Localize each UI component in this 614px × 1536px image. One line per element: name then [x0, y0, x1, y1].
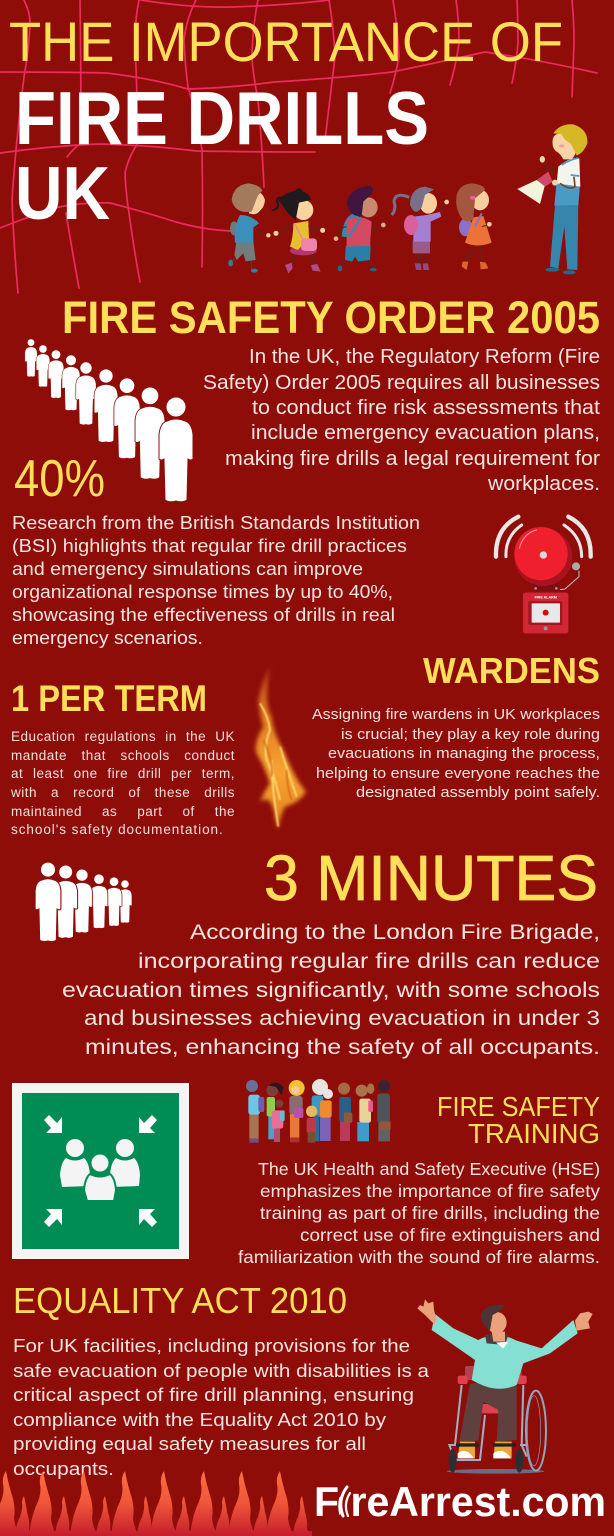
text: British Standards Institution research: (BSI) highlights that regular fire drill practices [12, 536, 407, 556]
decorative flames along bottom [0, 1471, 312, 1536]
text: British Standards Institution research: showcasing the effectiveness of drills in real [12, 605, 395, 625]
text: equality act paragraph: safe evacuation of people with disabilities is a [13, 1360, 430, 1381]
text: British Standards Institution research: organizational response times by up to 40%, [12, 582, 393, 602]
text: equality act paragraph: providing equal safety measures for all [13, 1433, 366, 1454]
text: Health and Safety Executive: correct use of fire extinguishers and [300, 1225, 600, 1245]
text: school fire drill paragraph: Education regulations in the UK [11, 729, 235, 744]
title: FIRE DRILLS [15, 76, 429, 160]
text: school fire drill paragraph: maintained as part of the [11, 804, 235, 819]
text: Health and Safety Executive: familiarization with the sound of fire alarms. [238, 1247, 600, 1267]
text: regulatory reform order: workplaces. [487, 473, 600, 495]
text: equality act paragraph: critical aspect of fire drill planning, ensuring [13, 1384, 414, 1405]
text: equality act paragraph: occupants. [13, 1458, 114, 1479]
illustration: children walking in line [228, 183, 386, 273]
text: London Fire Brigade [62, 921, 600, 1059]
title: UK [15, 151, 110, 235]
text: wardens paragraph: evacuations in managing the process, [328, 746, 600, 762]
text: Health and Safety Executive: training as part of fire drills, including the [260, 1203, 600, 1223]
kid five [456, 183, 492, 270]
teacher [517, 124, 587, 274]
logo: FireArrest.com: FireArrest.com [314, 1478, 606, 1525]
title [9, 10, 563, 235]
heading: equality act 2010: EQUALITY ACT 2010 [13, 1280, 347, 1321]
text: London Fire Brigade: minutes, enhancing the safety of all occupants. [85, 1036, 600, 1059]
text: Health and Safety Executive: The UK Health and Safety Executive (HSE) [258, 1159, 600, 1179]
stat: 40%: 40% [14, 450, 105, 508]
text: regulatory reform order: to conduct fire risk assessments that [252, 397, 600, 419]
heading: fire safety training: FIRE SAFETY [437, 1091, 600, 1122]
text: London Fire Brigade: and businesses achieving evacuation in under 3 [84, 1007, 600, 1030]
heading: fire safety training [437, 1091, 600, 1149]
text: regulatory reform order: include emergency evacuation plans, [251, 422, 600, 444]
text: equality act paragraph: compliance with the Equality Act 2010 by [13, 1409, 387, 1430]
text: school fire drill paragraph: with a record of these drills [11, 785, 235, 800]
kid two [272, 188, 325, 273]
kid four [392, 187, 449, 270]
heading: fire safety training: TRAINING [468, 1118, 600, 1149]
icon: queue of nine people [25, 339, 193, 502]
text: regulatory reform order: In the UK, the Regulatory Reform (Fire [249, 346, 600, 368]
heading: 3 minutes: 3 MINUTES [264, 842, 598, 914]
heading: wardens: WARDENS [423, 650, 600, 691]
text: British Standards Institution research: emergency scenarios. [12, 628, 203, 648]
text: school fire drill paragraph: mandate that schools conduct [11, 748, 235, 762]
text: wardens paragraph [312, 707, 600, 801]
text: school fire drill paragraph [11, 729, 235, 837]
illustration: crowd of people queuing [246, 1079, 391, 1143]
text: wardens paragraph: Assigning fire wardens in UK workplaces [312, 707, 600, 723]
text: wardens paragraph: helping to ensure everyone reaches the [316, 766, 600, 782]
kid three [334, 186, 386, 271]
text: school fire drill paragraph: school's safety documentation. [11, 822, 224, 837]
text: British Standards Institution research [12, 513, 420, 648]
text: equality act paragraph: For UK facilities, including provisions for the [13, 1335, 410, 1356]
illustration: girls and teacher with megaphone [392, 124, 587, 274]
text: wardens paragraph: is crucial; they play a key role during [341, 727, 600, 743]
text: British Standards Institution research: Research from the British Standards Institution [12, 513, 420, 533]
text: regulatory reform order [203, 346, 600, 495]
text: London Fire Brigade: evacuation times significantly, with some schools [62, 979, 600, 1002]
decorative net lines [0, 0, 597, 293]
icon: assembly point sign [12, 1083, 189, 1259]
title: THE IMPORTANCE OF [9, 10, 563, 73]
icon: fire alarm bell and call point: FIRE ALARM [534, 595, 557, 599]
icon: queue of six people [35, 862, 132, 942]
kid one [228, 183, 270, 273]
text: regulatory reform order: making fire drills a legal requirement for [225, 448, 600, 470]
text: school fire drill paragraph: at least one fire drill per term, [11, 766, 235, 781]
text: wardens paragraph: designated assembly point safely. [356, 785, 600, 801]
text: London Fire Brigade: According to the London Fire Brigade, [190, 921, 600, 944]
text: Health and Safety Executive: emphasizes the importance of fire safety [260, 1181, 600, 1201]
text: equality act paragraph [13, 1335, 430, 1479]
text: British Standards Institution research: and emergency simulations can improve [12, 559, 363, 579]
text: regulatory reform order: Safety) Order 2005 requires all businesses [203, 372, 600, 394]
illustration: person in wheelchair [417, 1299, 593, 1474]
icon: flame [256, 667, 306, 830]
icon: fire alarm bell and call point [496, 517, 591, 634]
text: London Fire Brigade: incorporating regular fire drills can reduce [138, 950, 600, 973]
text: Health and Safety Executive [238, 1159, 600, 1267]
heading: 1 per term: 1 PER TERM [11, 678, 207, 719]
